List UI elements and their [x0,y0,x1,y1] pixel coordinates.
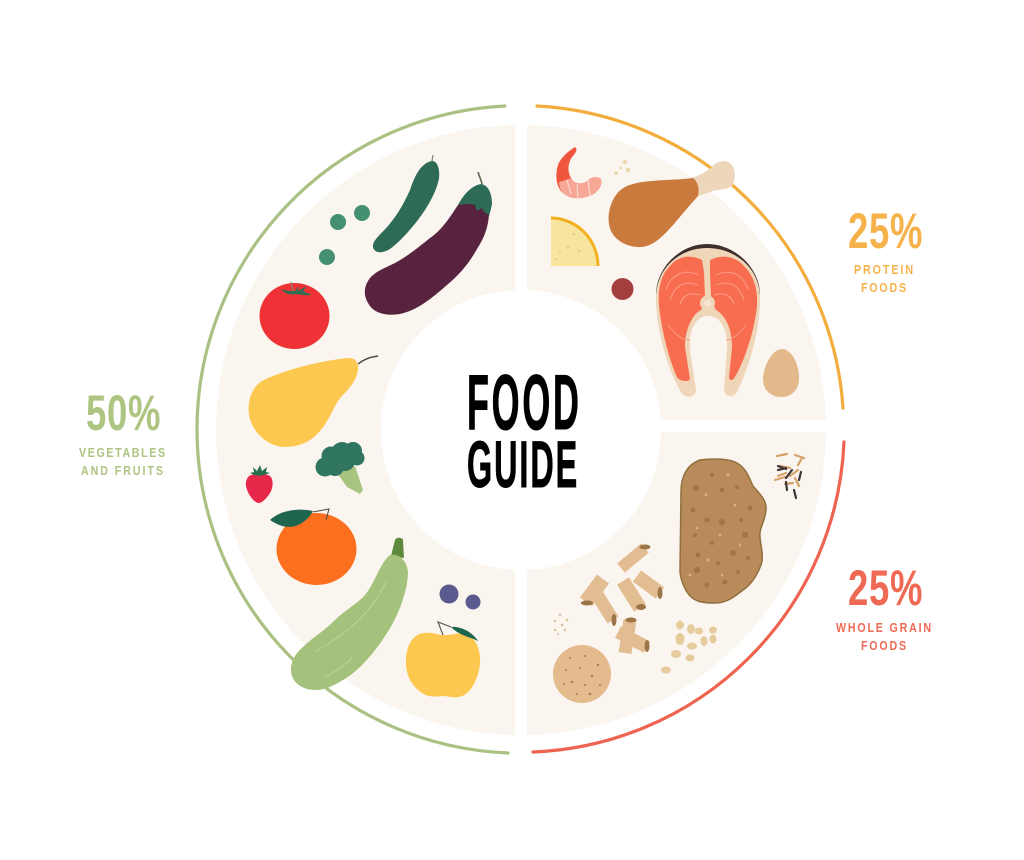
label: 50% vegetables and fruits: 50% [86,385,161,441]
label: 25% protein foods: FOODS [861,280,906,295]
icon: tomato [260,282,330,349]
icon: oats [661,620,717,674]
icon: bread [680,459,766,603]
icon: chicken leg [609,161,735,247]
label: 25% whole grain foods: WHOLE GRAIN [836,620,931,635]
label: 25% whole grain foods: FOODS [861,638,906,653]
icon: peas [319,205,370,265]
icon: orange [270,509,356,585]
icon: cucumber [373,155,439,252]
icon: blueberries [440,584,480,610]
panel: vegetables and fruits sector [216,125,515,735]
icon: apple [406,622,480,697]
title: food guide: FOOD [467,358,582,446]
label: 25% protein foods: 25% [848,203,923,259]
icon: cracker [553,645,611,703]
label: 25% protein foods [848,203,923,295]
label: 50% vegetables and fruits: VEGETABLES [79,445,165,460]
label: 50% vegetables and fruits: AND FRUITS [81,463,163,478]
icon: cheese [551,218,598,266]
label: 50% vegetables and fruits [79,385,165,478]
panel: protein sector [527,125,826,420]
label: 25% whole grain foods: 25% [848,560,923,616]
icon: pear [249,356,378,447]
icon: strawberry [246,465,273,503]
icon: egg [763,349,799,397]
ring arc: whole grain [533,442,844,752]
title: food guide: GUIDE [467,429,579,502]
icon: tiny seeds [554,614,568,635]
icon: pasta [581,544,662,653]
title: food guide [467,358,582,502]
icon: crumbs [614,160,630,175]
icon: shrimp [556,147,601,199]
icon: wild rice [775,454,804,498]
label: 25% protein foods: PROTEIN [854,262,913,277]
icon: hazelnut [612,278,634,300]
panel: whole grain sector [527,432,826,735]
ring arc: protein [537,106,843,408]
icon: salmon steak [656,244,760,397]
icon: eggplant [365,172,492,315]
icon: broccoli [316,442,364,494]
ring arc: vegetables and fruits [197,106,508,753]
icon: zucchini [291,538,408,690]
label: 25% whole grain foods [836,560,931,653]
